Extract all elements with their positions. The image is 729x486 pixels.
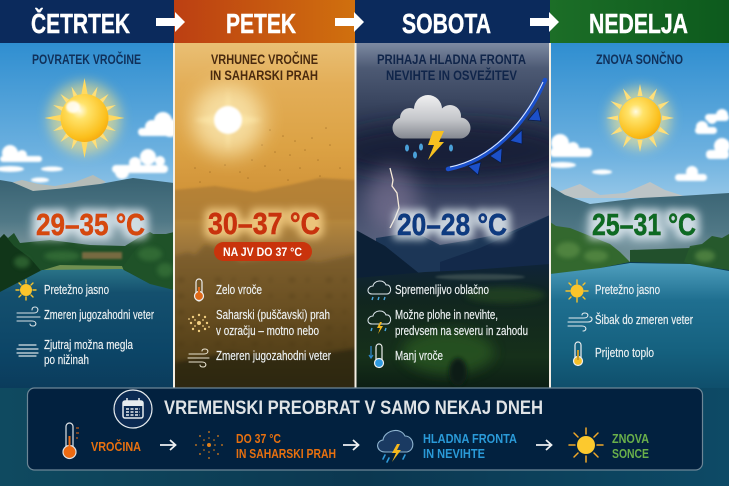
subtitle: Friday [210,52,318,83]
icon: cloud with lightning [368,311,391,334]
badge: southeast up to 37: NA JV DO 37 °C [223,245,302,259]
conditions: Sunday [566,280,693,366]
icon: lightning strike [390,168,399,228]
icon: wind [17,307,40,326]
scene: Thursday forest [0,232,174,292]
arrow: Friday to Saturday [335,12,364,32]
text: north and west: predvsem na severu in zahodu [395,324,528,338]
column divider: right [549,43,551,388]
temperature: Friday: 30–37 °C [208,206,320,241]
subtitle: Friday: IN SAHARSKI PRAH [210,68,318,83]
arrow: Thursday to Friday [156,12,185,32]
scene: Sunday clouds [548,109,729,181]
header: Friday [174,0,355,43]
panel: Friday [174,43,356,388]
icon: wind [568,313,592,331]
subtitle: Saturday: NEVIHTE IN OSVEŽITEV [386,68,517,83]
conditions: Friday [188,279,331,367]
scene: Saturday meadow [402,274,545,386]
text: southwest wind: Zmeren jugozahodni veter [44,308,154,322]
subtitle: Saturday: PRIHAJA HLADNA FRONTA [377,52,526,67]
header: Saturday: SOBOTA [402,8,491,39]
text: mostly clear: Pretežno jasno [44,283,109,297]
label: sun again [612,431,649,461]
arrow: step three [536,440,552,450]
scene: lightning glow [366,168,418,232]
scene: Saturday storm sky [356,43,550,253]
subtitle: Friday: VRHUNEC VROČINE [211,52,318,67]
summary panel [28,388,702,470]
icon: storm cloud [378,430,413,462]
header: Thursday [0,0,174,43]
panel: Sunday [548,43,729,388]
subtitle: Sunday: ZNOVA SONČNO [596,52,683,67]
icon: sun [569,428,603,462]
icon: fog [17,345,38,356]
header: Thursday: ČETRTEK [31,7,130,39]
label: sun again: ZNOVA [612,431,649,446]
header: Sunday [550,0,729,43]
badge: southeast up to 37 [214,242,312,261]
summary title: VREMENSKI PREOBRAT V SAMO NEKAJ DNEH [164,398,543,419]
icon: calendar [114,390,152,428]
text: very hot: Zelo vroče [216,283,262,297]
sun: Friday [192,84,264,156]
scene: Saturday mountains [356,216,549,278]
text: light wind: Šibak do zmeren veter [595,312,693,327]
icon: sun [16,280,36,300]
arrow: step one [160,440,176,450]
header: Friday: PETEK [226,8,296,39]
icon: dust [188,314,210,332]
icon: cloud with rain [368,281,391,300]
icon: storm cloud [392,95,470,160]
header bar [0,0,729,43]
text: morning fog: Zjutraj možna megla [44,338,133,352]
scene: Saturday valley [356,264,550,388]
scene: Friday dusty sky [174,43,356,388]
scene: Sunday sky [551,43,729,204]
icon: sun [566,280,588,302]
text: saharan dust: Saharski (puščavski) prah [216,308,330,322]
scene: Thursday mountains [0,175,174,250]
arrow: step two [343,440,358,450]
subtitle: Thursday: POVRATEK VROČINE [32,52,141,67]
sun: Sunday [606,84,674,152]
conditions: Saturday [368,281,528,368]
text: southwest wind: Zmeren jugozahodni veter [216,349,331,363]
panel: Saturday [356,43,549,388]
scene: Friday hills [174,178,356,220]
icon: thermometer [63,423,79,458]
label: sun again: SONCE [612,446,649,461]
conditions: Thursday [16,280,154,367]
column divider: left [173,43,175,388]
icon: thermometer cooling [369,344,384,368]
panel: Thursday [0,43,179,388]
temperature: Saturday: 20–28 °C [397,207,507,242]
header: Saturday [355,0,550,43]
scene: Friday dust particles [194,127,341,183]
scene: Sunday lake [550,263,729,388]
icon: cold front line [448,80,545,175]
label: up to 37 and saharan dust: DO 37 °C [236,431,281,446]
scene: Sunday forest [550,222,729,274]
arrow: Saturday to Sunday [530,12,559,32]
scene: Thursday sky [0,43,173,186]
scene: Friday town [174,244,356,388]
temperature: Sunday: 25–31 °C [592,207,696,242]
scene: dark cloud layer [330,122,570,178]
header: Sunday: NEDELJA [589,8,688,39]
label: up to 37 and saharan dust [236,431,336,461]
icon: wind [188,349,209,367]
label: up to 37 and saharan dust: IN SAHARSKI PRAH [236,446,336,461]
text: pleasantly warm: Prijetno toplo [595,346,654,360]
text: changeable cloudy: Spremenljivo oblačno [395,283,489,297]
temperature: Thursday: 29–35 °C [36,207,145,242]
icon: dust [195,431,223,459]
text: showers and storms: Možne plohe in nevihte, [395,308,498,322]
page footer background [0,385,729,486]
label: heat: VROČINA [91,439,142,454]
icon: thermometer [194,279,204,301]
scene: Sunday mountains [550,182,729,262]
label: cold front and storms [423,431,518,461]
scene: Thursday lake [0,269,174,388]
subtitle: Saturday [377,52,526,83]
label: cold front and storms: HLADNA FRONTA [423,431,518,446]
sun: Thursday [44,78,124,158]
icon: thermometer [574,342,582,366]
text: mostly clear: Pretežno jasno [595,283,660,297]
scene: Thursday clouds [0,112,179,182]
text: hazy sky: v ozračju – motno nebo [216,324,319,338]
column divider: middle [354,43,356,388]
text: less hot: Manj vroče [395,349,443,363]
text: fog lowlands: po nižinah [44,353,89,367]
label: cold front and storms: IN NEVIHTE [423,446,485,461]
